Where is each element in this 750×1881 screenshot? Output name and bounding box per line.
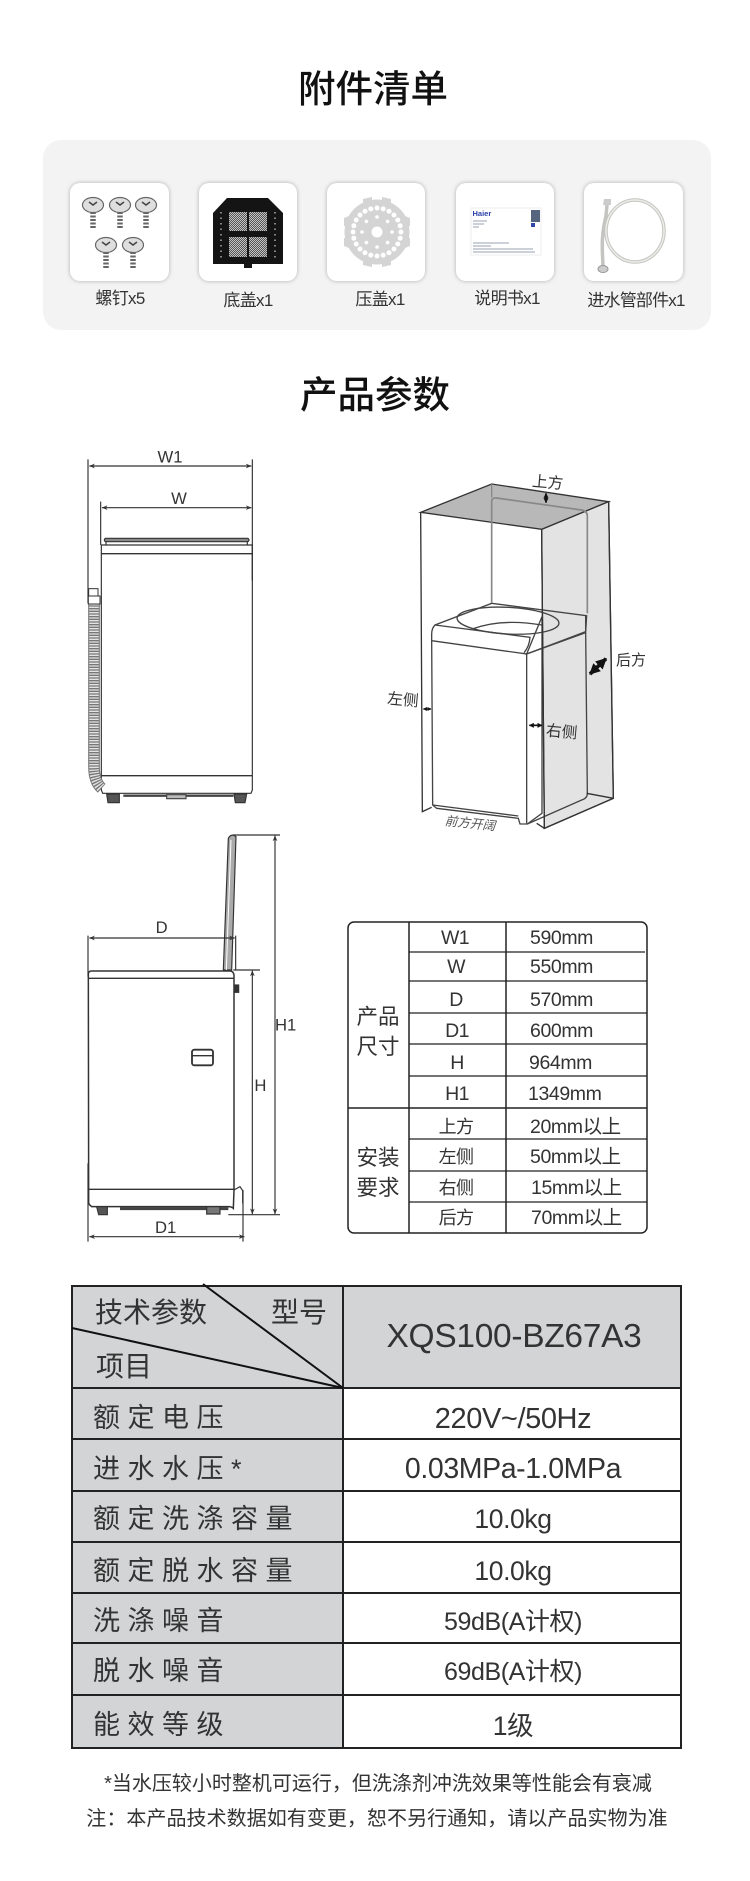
header labels: 项目	[96, 1351, 152, 1382]
label: pressure plate: 压盖x1	[355, 290, 405, 309]
group label: install requirements: 安装	[356, 1146, 400, 1170]
group label: install requirements: 要求	[356, 1176, 400, 1200]
dimension: D1	[88, 1163, 244, 1242]
row values: 0.03MPa-1.0MPa	[405, 1453, 622, 1485]
column: dimension values: 1349mm	[528, 1083, 601, 1105]
card: manual	[456, 183, 554, 281]
machine body front	[101, 538, 252, 803]
label: inlet hose: 进水管部件x1	[587, 291, 685, 310]
title: product parameters: 产品参数	[300, 374, 450, 416]
footnote: water pressure: *当水压较小时整机可运行，但洗涤剂冲洗效果等性能会有衰减	[104, 1772, 652, 1795]
top face	[421, 484, 609, 529]
diagram: front view with W and W1	[88, 447, 252, 803]
label: left clearance	[387, 690, 431, 710]
row values: 220V~/50Hz	[435, 1403, 591, 1435]
column: dimension names: 右侧	[439, 1178, 473, 1198]
row labels: 洗涤噪音	[93, 1606, 231, 1636]
row values: 59dB(A计权)	[444, 1608, 582, 1636]
header labels: 型号	[271, 1297, 327, 1328]
label: right clearance: 右侧	[545, 722, 578, 742]
group label: product size: 产品	[356, 1005, 400, 1029]
group label: install requirements	[356, 1146, 400, 1200]
panel: accessories	[43, 140, 711, 330]
label: top clearance: 上方	[531, 472, 564, 493]
machine side	[88, 835, 243, 1215]
row values: 10.0kg	[474, 1556, 552, 1586]
column: dimension values: 20mm以上	[530, 1116, 621, 1138]
row values: 10.0kg	[474, 1504, 552, 1534]
column: dimension values: 550mm	[530, 956, 593, 978]
row labels: 额定洗涤容量	[93, 1504, 300, 1534]
column: dimension names: 上方	[439, 1117, 473, 1137]
label: right clearance	[529, 722, 578, 742]
row labels: 额定电压	[93, 1403, 231, 1433]
group label: product size: 尺寸	[356, 1035, 400, 1059]
group label: product size	[356, 1005, 400, 1059]
card: pressure plate	[327, 183, 425, 281]
card: manual: Haier	[472, 209, 491, 218]
row labels: 能效等级	[93, 1710, 231, 1740]
row values: 69dB(A计权)	[444, 1658, 582, 1686]
label: left clearance: 左侧	[387, 690, 419, 710]
column: dimension values: 570mm	[530, 989, 593, 1011]
machine in box	[432, 603, 587, 824]
row labels: 额定脱水容量	[93, 1556, 300, 1586]
label: bottom cover: 底盖x1	[223, 291, 273, 310]
open lid	[492, 498, 587, 613]
column: dimension names: W	[447, 956, 466, 978]
column: dimension values: 15mm以上	[531, 1177, 622, 1199]
dimension: D1: D1	[155, 1218, 176, 1237]
label: top clearance	[531, 472, 564, 503]
row values: 1级	[493, 1711, 533, 1741]
column: dimension names: W1	[441, 927, 469, 949]
column: dimension values: 70mm以上	[531, 1207, 622, 1229]
header labels	[95, 1297, 327, 1382]
column: dimension names: D	[449, 989, 463, 1011]
header labels: 技术参数	[95, 1297, 207, 1328]
card: screws	[70, 183, 169, 281]
column: dimension names	[439, 927, 473, 1228]
dimension: H	[228, 970, 280, 1215]
dimension: W: W	[171, 489, 187, 508]
column: dimension names: H	[450, 1052, 464, 1074]
column: dimension values: 964mm	[529, 1052, 592, 1074]
dimension: W1: W1	[158, 447, 182, 466]
right side plane	[542, 502, 613, 828]
box edges	[421, 502, 613, 828]
drain hose	[88, 589, 102, 788]
label: front open: 前方开阔	[444, 814, 498, 834]
column: dimension names: 后方	[439, 1208, 473, 1228]
row labels: 脱水噪音	[93, 1656, 231, 1686]
dimension: D: D	[156, 918, 168, 937]
label: rear clearance	[590, 652, 646, 674]
label: rear clearance: 后方	[616, 652, 646, 669]
label: screws: 螺钉x5	[95, 289, 145, 308]
diagram: installation clearance box	[387, 472, 646, 834]
card: inlet hose	[584, 183, 683, 281]
row values	[405, 1403, 622, 1741]
table: technical parameters	[72, 1284, 681, 1748]
column: dimension names: 左侧	[439, 1147, 473, 1167]
column: dimension values: 50mm以上	[530, 1146, 621, 1168]
row labels: 进水水压*	[93, 1454, 249, 1484]
card: bottom cover	[199, 183, 297, 281]
model number: XQS100-BZ67A3	[387, 1318, 641, 1355]
label: manual: 说明书x1	[474, 289, 540, 308]
dimension: D	[88, 918, 236, 977]
row labels	[93, 1403, 300, 1740]
dimension: H: H	[254, 1076, 266, 1095]
diagram: side view with D, D1, H, H1	[88, 835, 296, 1242]
footnote: data disclaimer: 注：本产品技术数据如有变更，恕不另行通知，请以产品实物为准	[86, 1807, 668, 1830]
title: accessories list: 附件清单	[298, 68, 448, 110]
column: dimension names: D1	[445, 1020, 469, 1042]
column: dimension names: H1	[445, 1083, 469, 1105]
column: dimension values	[528, 927, 622, 1229]
dimension: H1: H1	[275, 1016, 296, 1035]
table: dimensions and installation	[348, 922, 647, 1233]
column: dimension values: 590mm	[530, 927, 593, 949]
column: dimension values: 600mm	[530, 1020, 593, 1042]
